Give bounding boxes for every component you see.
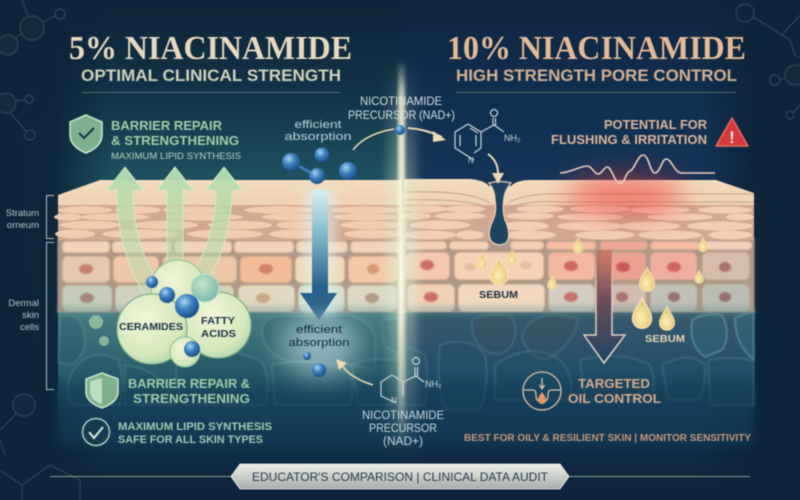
- skin cross-section: [54, 177, 754, 445]
- lower barrier text: STRENGTHENING: [133, 391, 250, 406]
- sebum labels: SEBUM: [479, 289, 518, 301]
- left title: [69, 30, 352, 85]
- sebum labels: SEBUM: [645, 333, 685, 345]
- cell nuclei: [79, 260, 731, 303]
- lower precursor label: PRECURSOR: [369, 423, 437, 435]
- lower nicotinamide structure: N: [391, 396, 397, 405]
- top precursor label: NICOTINAMIDE: [360, 96, 442, 108]
- lower barrier text: BARRIER REPAIR &: [128, 376, 250, 391]
- top barrier text: & STRENGTHENING: [111, 133, 239, 148]
- cell rows: [58, 238, 754, 312]
- central absorption arrow: [300, 190, 337, 320]
- bubbles: ceramides and fatty acids: CERAMIDES: [119, 322, 183, 333]
- lower barrier text: [128, 376, 250, 406]
- irritation wave: [560, 155, 715, 183]
- warning triangle icon: [716, 118, 748, 147]
- cell and dermis transition: [58, 306, 754, 316]
- top absorption label: [284, 119, 352, 143]
- top shield icon: [70, 115, 102, 153]
- oil control text: TARGETED: [578, 376, 650, 391]
- bracket labels: cells: [20, 322, 39, 333]
- redness glow: [565, 177, 685, 213]
- right title: HIGH STRENGTH PORE CONTROL: [456, 66, 737, 85]
- oil control text: OIL CONTROL: [568, 391, 661, 406]
- flushing warning text: POTENTIAL FOR: [604, 117, 708, 132]
- lower absorption glow and label: absorption: [288, 337, 350, 349]
- bracket labels: skin: [22, 310, 39, 321]
- bubbles: ceramides and fatty acids: FATTY: [201, 315, 235, 327]
- stratum corneum right with pore: [399, 179, 754, 245]
- lower benefit text: MAXIMUM LIPID SYNTHESIS: [118, 421, 272, 433]
- footer banner: [50, 464, 750, 489]
- dermal layer: [58, 308, 754, 445]
- left title: 5% NIACINAMIDE: [69, 30, 352, 67]
- top barrier text: MAXIMUM LIPID SYNTHESIS: [111, 151, 241, 161]
- warning triangle icon: !: [729, 128, 735, 147]
- center divider beam: [388, 60, 416, 460]
- oil control text: [568, 376, 661, 406]
- lower absorption glow and label: efficient: [296, 324, 342, 336]
- top nicotinamide structure: N: [468, 156, 474, 165]
- lower precursor label: (NAD+): [383, 436, 423, 448]
- sebum labels: [479, 289, 685, 345]
- flushing warning text: FLUSHING & IRRITATION: [551, 132, 707, 147]
- flushing warning text: [551, 117, 708, 147]
- lower nicotinamide structure: NH₂: [425, 379, 442, 389]
- bracket labels: [6, 196, 54, 390]
- top nicotinamide structure: NH₂: [504, 133, 521, 143]
- check circle icon: [82, 418, 110, 446]
- left title: OPTIMAL CLINICAL STRENGTH: [81, 66, 341, 85]
- lower barrier shield: [86, 373, 118, 408]
- lower absorption glow and label: [280, 313, 360, 377]
- bubbles: ceramides and fatty acids: [89, 260, 251, 367]
- sebum droplets: [477, 238, 708, 330]
- bracket labels: Stratum: [6, 208, 39, 219]
- lower curved arrow: [336, 359, 373, 385]
- top barrier text: [111, 118, 241, 161]
- lower benefit text: SAFE FOR ALL SKIN TYPES: [118, 434, 263, 446]
- right title: 10% NIACINAMIDE: [447, 30, 746, 67]
- outlined down arrow: [584, 250, 625, 363]
- top barrier text: BARRIER REPAIR: [111, 118, 223, 133]
- green arrows: [107, 167, 242, 300]
- lower benefit text: [118, 421, 272, 446]
- oil control icon: [523, 372, 561, 410]
- right title: [447, 30, 746, 85]
- footer banner: EDUCATOR'S COMPARISON | CLINICAL DATA AUDIT: [252, 470, 549, 484]
- lower nicotinamide structure: [381, 358, 442, 405]
- lower precursor label: NICOTINAMIDE: [362, 410, 444, 422]
- bracket labels: Dermal: [8, 298, 39, 309]
- top absorption label: absorption: [284, 131, 352, 143]
- bubbles: ceramides and fatty acids: ACIDS: [201, 328, 236, 340]
- pore: [489, 182, 511, 245]
- stratum corneum left: [54, 180, 401, 240]
- top precursor dot and arrows: [353, 125, 504, 184]
- bracket labels: orneum: [7, 220, 39, 231]
- best for text: BEST FOR OILY & RESILIENT SKIN | MONITOR SENSITIVITY: [464, 433, 751, 444]
- lower precursor label: [362, 410, 444, 448]
- top precursor label: PRECURSOR (NAD+): [348, 110, 455, 122]
- top precursor label: [348, 96, 455, 122]
- molecules above skin: [282, 148, 357, 184]
- top nicotinamide structure: [455, 110, 521, 165]
- top absorption label: efficient: [294, 119, 342, 131]
